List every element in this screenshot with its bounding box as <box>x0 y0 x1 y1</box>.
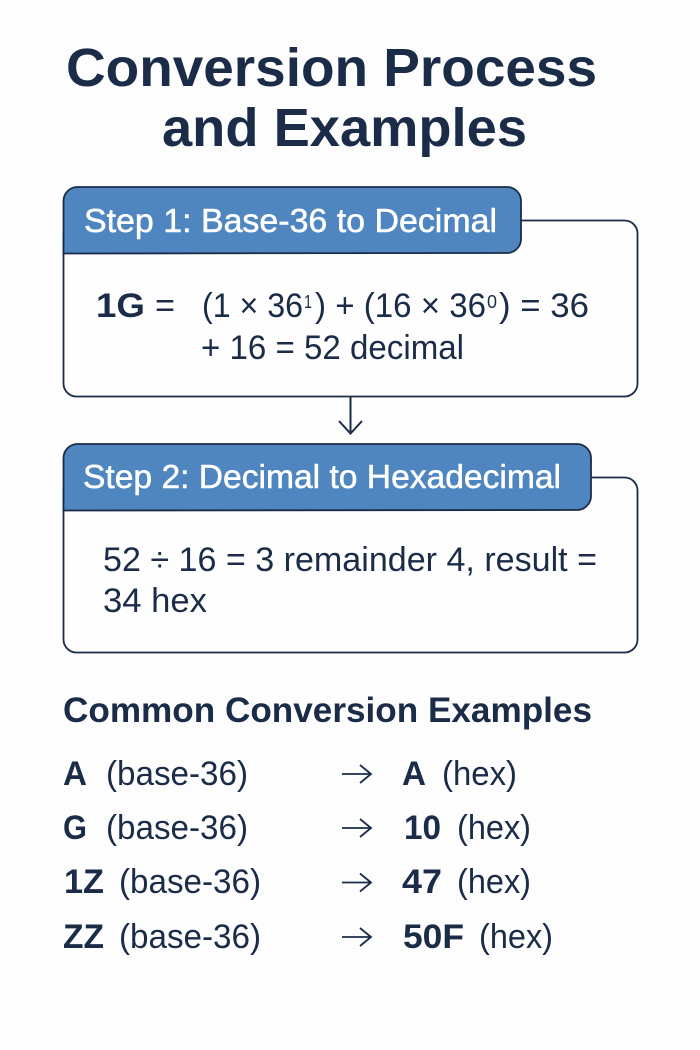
step 2 formula <box>103 541 597 620</box>
example row: ZZ: ZZ <box>63 918 104 956</box>
step 1 formula: 1G <box>96 287 145 325</box>
heading: common conversion examples: Common Conversion Examples <box>63 691 592 730</box>
example row: 1Z <box>64 863 531 901</box>
title: and Examples <box>162 98 527 158</box>
panel: step 2 <box>64 444 638 652</box>
step 1 header <box>64 187 521 254</box>
step 2 formula: 52 ÷ 16 = 3 remainder 4, result = <box>103 541 597 579</box>
step 2 header: Step 2: Decimal to Hexadecimal <box>83 458 561 495</box>
step 1 body box <box>64 220 638 396</box>
example row: ZZ: (base-36) <box>119 918 261 956</box>
step 1 formula <box>96 287 589 367</box>
example row: A: (hex) <box>442 755 517 793</box>
step 1 formula: = <box>155 287 175 325</box>
step 2 body box <box>64 478 638 652</box>
step 1 header: Step 1: Base-36 to Decimal <box>84 202 497 239</box>
example row: ZZ: (hex) <box>479 918 553 956</box>
example row: 1Z: (base-36) <box>119 863 261 901</box>
step 1 formula: 1 <box>304 292 312 312</box>
example row: G: 10 <box>404 809 441 847</box>
example row: A: A <box>402 755 426 793</box>
step 1 formula: (1 × 36 <box>202 287 303 325</box>
step 2 formula: 34 hex <box>103 582 207 620</box>
examples list <box>63 755 553 956</box>
example row: A: (base-36) <box>106 755 248 793</box>
example row: ZZ <box>63 918 553 956</box>
example row: G: (hex) <box>457 809 531 847</box>
example row: A: A <box>63 755 87 793</box>
example row: 1Z: 47 <box>402 863 442 901</box>
arrow: step 1 to step 2 <box>339 396 362 434</box>
step 1 formula: 0 <box>487 292 497 312</box>
title: Conversion Process <box>66 38 597 98</box>
example row: A <box>63 755 517 793</box>
example row: G: (base-36) <box>106 809 248 847</box>
example row: 1Z: (hex) <box>457 863 531 901</box>
example row: 1Z: 1Z <box>64 863 104 901</box>
title <box>66 38 597 158</box>
example row: G: G <box>63 809 87 847</box>
step 1 formula: ) + (16 × 36 <box>315 287 486 325</box>
panel: step 1 <box>64 187 638 396</box>
step 1 formula: + 16 = 52 decimal <box>201 329 464 367</box>
example row: ZZ: 50F <box>403 918 464 956</box>
example row: G <box>63 809 531 847</box>
step 2 header <box>64 444 591 510</box>
step 1 formula: ) = 36 <box>499 287 589 325</box>
